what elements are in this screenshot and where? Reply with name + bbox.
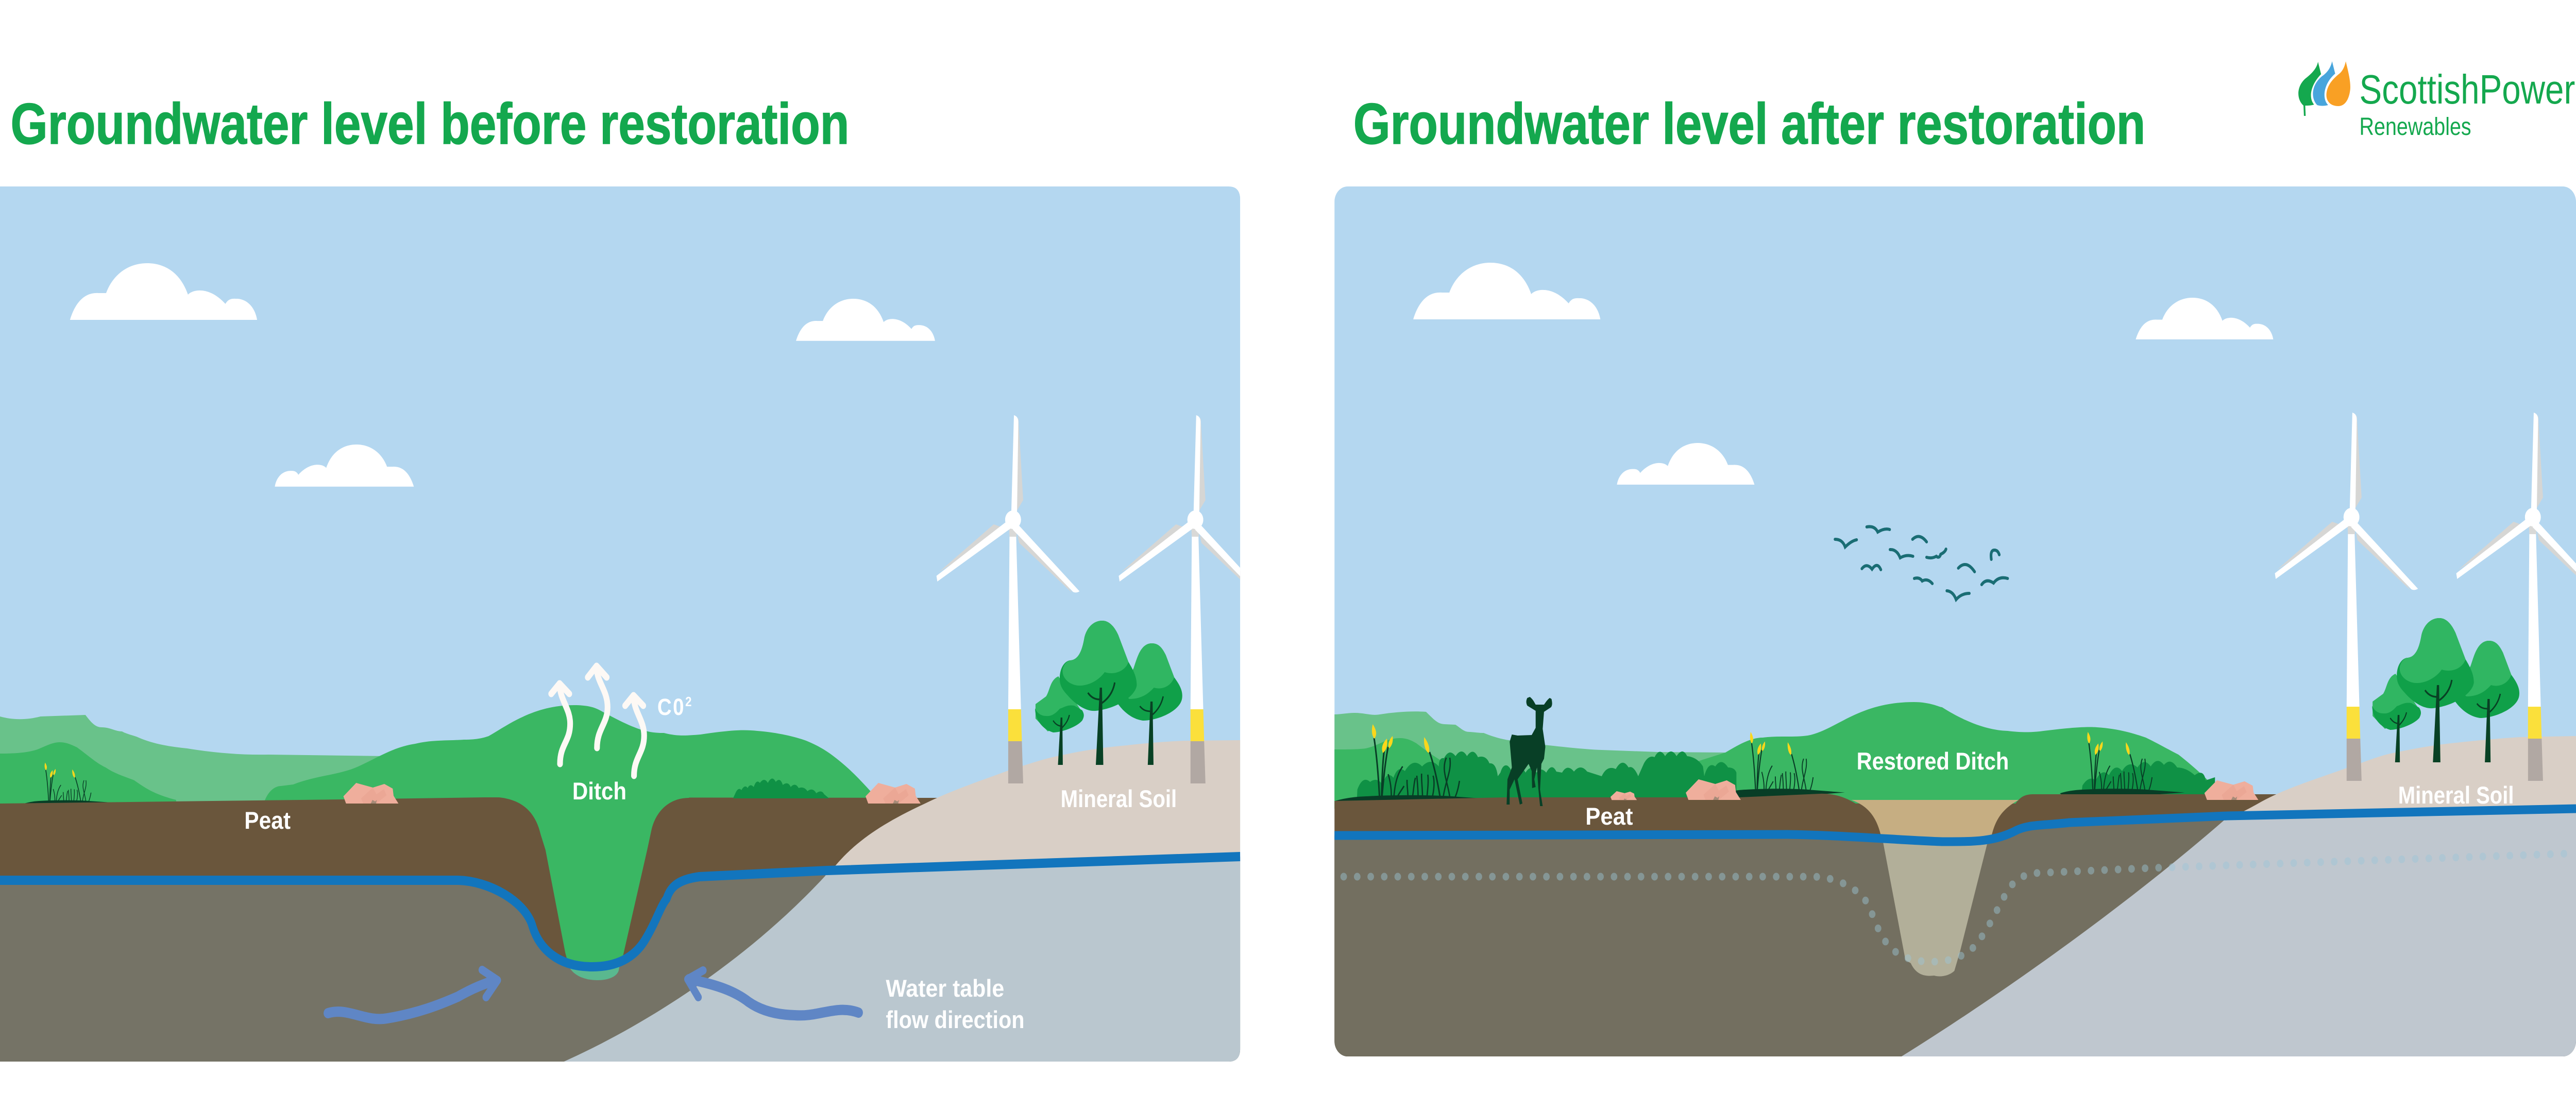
label: Mineral Soil: Mineral Soil	[1061, 785, 1177, 813]
icon: cloud small	[1617, 443, 1754, 485]
label: water table flow direction: flow direction	[886, 1006, 1025, 1034]
peat layer	[0, 797, 937, 958]
icon: wind turbine 2	[1118, 415, 1262, 783]
icon: cloud large	[70, 263, 257, 320]
mineral soil above water	[828, 740, 1240, 876]
background hill mid	[0, 742, 176, 809]
label: Restored Ditch: Restored Ditch	[1857, 748, 2009, 775]
title: after restoration: Groundwater level after restoration	[1353, 92, 2145, 157]
ditch bottom below water table	[570, 967, 619, 980]
arrow: flow from left	[328, 970, 498, 1019]
icon: rock centre	[1686, 779, 1741, 800]
label: water table flow direction	[886, 975, 1025, 1034]
mineral soil below water	[1902, 809, 2576, 1056]
label: Mineral Soil: Mineral Soil	[2398, 782, 2514, 809]
title: before restoration: Groundwater level before restoration	[11, 92, 849, 157]
water table	[1334, 809, 2576, 842]
mineral soil above water	[2219, 736, 2576, 826]
bushes left and centre	[1357, 752, 1736, 799]
icon: wind turbine 1	[2275, 413, 2418, 781]
main hill	[1694, 702, 2219, 809]
icon: trees	[1035, 621, 1182, 765]
ditch below water table	[1883, 840, 1988, 976]
arrow: flow from right	[688, 970, 858, 1015]
icon: reeds left	[1335, 724, 1503, 807]
restored ditch fill	[1851, 800, 2019, 845]
icon: small rock	[1611, 791, 1637, 800]
label: Ditch: Ditch	[572, 778, 626, 805]
water table	[0, 857, 1240, 967]
label: Peat: Peat	[1585, 803, 1633, 830]
icon: cloud right	[796, 299, 935, 341]
icon: cloud large	[1413, 263, 1600, 319]
icon: rock right	[2205, 780, 2258, 800]
previous water table dotted line	[1344, 853, 2571, 962]
birds	[1835, 526, 2008, 600]
background hill light	[1334, 711, 1725, 809]
label: CO2: C0	[657, 694, 685, 720]
main hill	[265, 705, 876, 809]
label: water table flow direction: Water table	[886, 975, 1004, 1002]
icon: cloud right	[2136, 298, 2273, 339]
icon: rock right	[866, 783, 921, 804]
background hill light	[0, 715, 387, 809]
background hill mid	[1334, 738, 1488, 809]
mineral soil below water	[564, 857, 1240, 1062]
icon: wind turbine 2	[2456, 413, 2576, 781]
sky	[1334, 186, 2576, 1056]
logo: ScottishPower Renewables	[2298, 61, 2575, 141]
icon: cloud small	[275, 445, 414, 487]
icon: reeds right	[2060, 732, 2184, 798]
label: CO2: 2	[685, 694, 693, 709]
icon: rock left	[344, 783, 398, 804]
bushes right	[2081, 761, 2215, 798]
sky	[0, 186, 1240, 1062]
icon: deer	[1506, 697, 1552, 806]
icon: three leaves	[2298, 61, 2350, 116]
saturated peat layer	[1334, 809, 2576, 1056]
icon: reeds	[25, 762, 108, 804]
icon: wind turbine 1	[937, 415, 1079, 783]
saturated peat layer	[0, 857, 1240, 1062]
icon: bush	[733, 778, 829, 798]
panel: before restoration	[0, 186, 1262, 1062]
ditch	[499, 797, 689, 962]
arrows: CO2 release	[551, 666, 644, 776]
icon: trees	[2372, 618, 2519, 762]
label: Peat: Peat	[244, 807, 291, 834]
icon: reeds centre	[1723, 732, 1845, 798]
peat layer	[1334, 794, 2276, 1056]
panel: after restoration	[1334, 186, 2576, 1056]
logo subline: Renewables	[2360, 113, 2471, 141]
